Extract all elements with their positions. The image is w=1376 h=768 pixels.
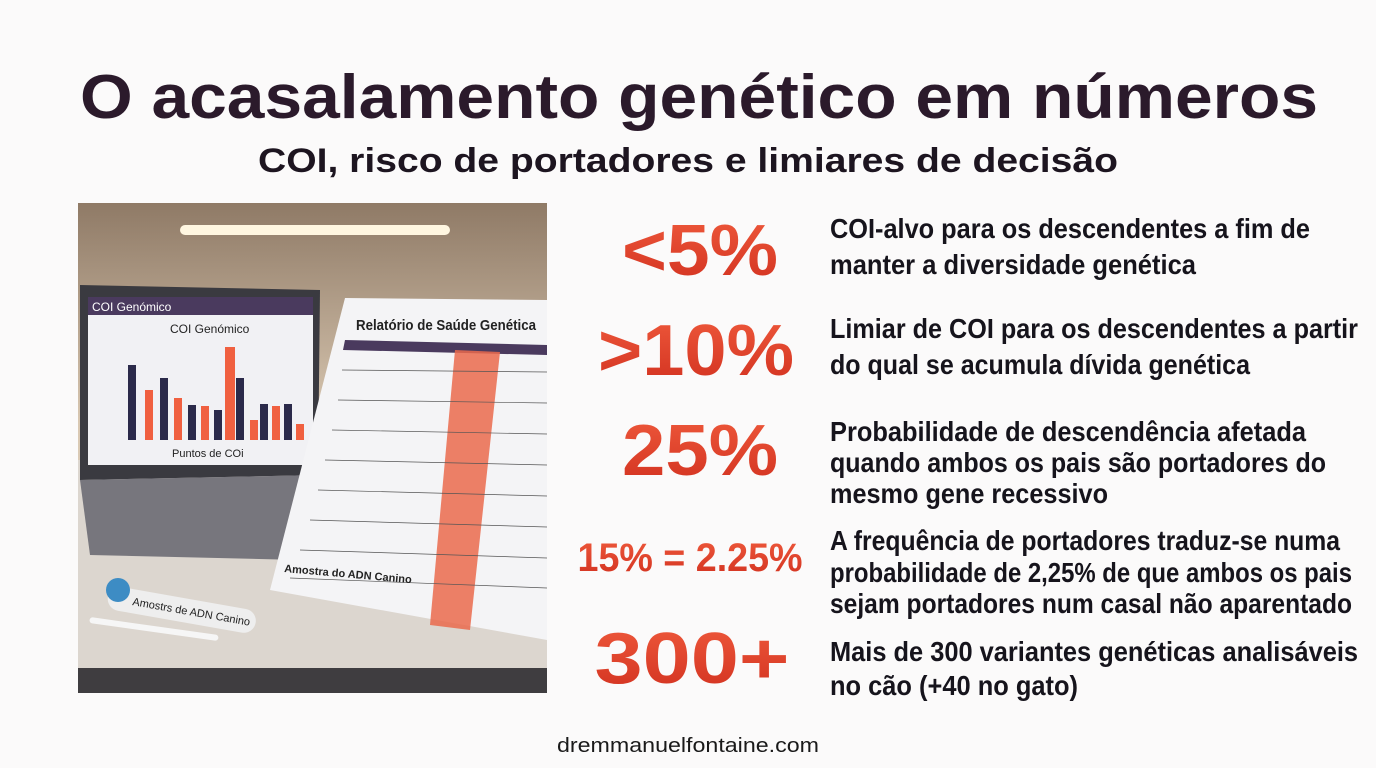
stat 5: 300+ xyxy=(594,619,790,699)
laptop: COI Genómico xyxy=(170,322,250,336)
stat 1 xyxy=(622,211,1310,291)
stat 3 xyxy=(622,411,1326,509)
DNA sample tube xyxy=(89,578,258,641)
laptop xyxy=(80,285,320,560)
stat 1: <5% xyxy=(622,211,778,291)
stat 1: manter a diversidade genética xyxy=(830,249,1196,280)
stat 5 xyxy=(594,619,1358,701)
stat 4: 15% = 2.25% xyxy=(578,536,802,580)
stat 5: no cão (+40 no gato) xyxy=(830,670,1078,701)
stat 1: COI-alvo para os descendentes a fim de xyxy=(830,213,1310,244)
footer: dremmanuelfontaine.com xyxy=(557,735,819,757)
stat 2 xyxy=(598,311,1358,391)
title: O acasalamento genético em números xyxy=(80,63,1318,132)
stat 3: Probabilidade de descendência afetada xyxy=(830,416,1306,447)
illustration: lab desk with laptop and report xyxy=(78,203,550,693)
DNA sample tube: Amostrs de ADN Canino xyxy=(131,596,251,629)
report sheet xyxy=(270,298,550,640)
report sheet: Relatório de Saúde Genética xyxy=(356,317,537,334)
stat 2: >10% xyxy=(598,311,794,391)
stat 3: 25% xyxy=(622,411,778,491)
subtitle: COI, risco de portadores e limiares de decisão xyxy=(258,142,1118,180)
stat 3: mesmo gene recessivo xyxy=(830,478,1108,509)
stat 3: quando ambos os pais são portadores do xyxy=(830,447,1326,478)
report sheet: Amostra do ADN Canino xyxy=(284,563,413,586)
laptop: COI Genómico xyxy=(92,300,172,314)
stat 2: do qual se acumula dívida genética xyxy=(830,349,1250,380)
stat 4 xyxy=(578,525,1352,619)
laptop: Puntos de COi xyxy=(172,448,244,460)
